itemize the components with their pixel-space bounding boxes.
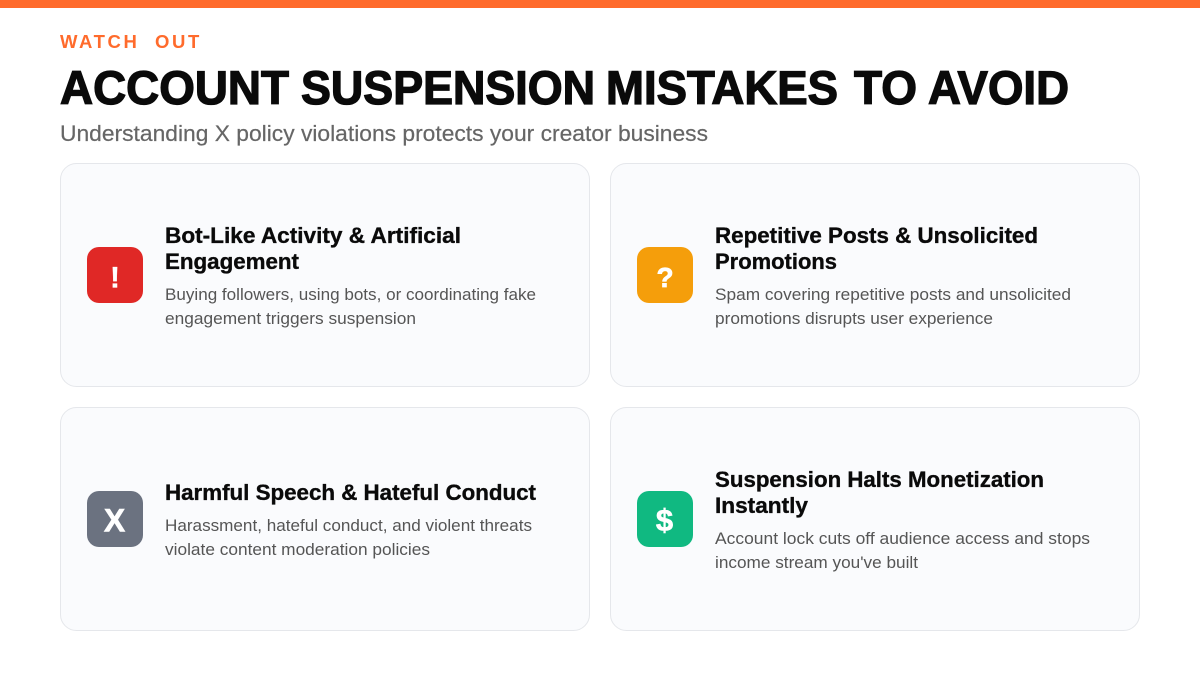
icon: letter x [87, 491, 143, 547]
title: AVOID [928, 61, 1069, 114]
title: SUSPENSION [301, 61, 595, 114]
description: bot-like activity: engagement triggers suspension [165, 309, 416, 328]
heading: bot-like activity: Engagement [165, 249, 300, 274]
icon: dollar sign: $ [656, 502, 673, 538]
icon: exclamation mark [87, 247, 143, 303]
eyebrow label: WATCH [60, 31, 139, 52]
title: TO [854, 61, 917, 114]
top accent bar [0, 0, 1200, 8]
panel: monetization halt [610, 408, 1140, 630]
description: harmful speech: Harassment, hateful conduct, and violent threats [165, 516, 532, 535]
heading: monetization halt: Suspension Halts Monetization [715, 467, 1044, 492]
description: bot-like activity: Buying followers, using bots, or coordinating fake [165, 285, 536, 304]
panel: harmful speech [60, 408, 590, 630]
icon: dollar sign [637, 491, 693, 547]
eyebrow label: OUT [155, 31, 202, 52]
icon: exclamation mark: ! [110, 262, 120, 294]
subtitle: Understanding X policy violations protects your creator business [60, 121, 708, 146]
title: ACCOUNT [60, 61, 289, 114]
heading: repetitive posts: Repetitive Posts & Unsolicited [715, 223, 1038, 248]
description: repetitive posts: promotions disrupts user experience [715, 309, 993, 328]
title: MISTAKES [606, 61, 838, 114]
heading: harmful speech: Harmful Speech & Hateful Conduct [165, 480, 537, 505]
description: monetization halt: Account lock cuts off audience access and stops [715, 529, 1090, 548]
heading: monetization halt: Instantly [715, 493, 809, 518]
heading: bot-like activity: Bot-Like Activity & Artificial [165, 223, 461, 248]
icon: question mark: ? [656, 262, 674, 293]
description: monetization halt: income stream you've built [715, 553, 918, 572]
icon: letter x: X [104, 502, 126, 538]
description: repetitive posts: Spam covering repetitive posts and unsolicited [715, 285, 1071, 304]
heading: repetitive posts: Promotions [715, 249, 837, 274]
icon: question mark [637, 247, 693, 303]
description: harmful speech: violate content moderation policies [165, 540, 430, 559]
panel: repetitive posts [610, 164, 1140, 386]
panel: bot-like activity [60, 164, 590, 386]
